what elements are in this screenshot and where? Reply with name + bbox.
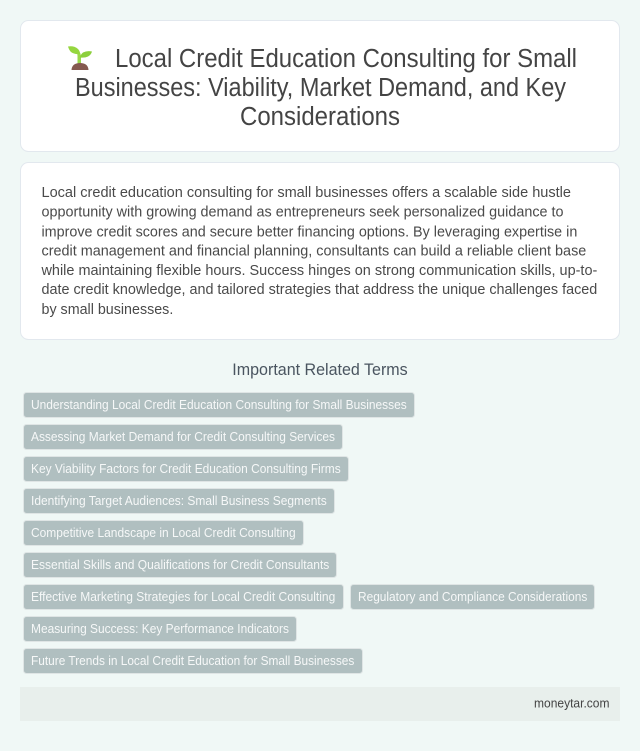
panel: summary description: [20, 162, 620, 340]
summary text block: credit management and financial planning, consultants can build a reliable client base: [42, 242, 586, 260]
summary text block: date credit knowledge, and tailored strategies that address the unique challenges faced: [42, 281, 597, 298]
footer: [20, 687, 620, 721]
tag: viability factors: [24, 456, 348, 482]
tag: essential skills: Essential Skills and Qualifications for Credit Consultants: [31, 557, 329, 572]
tag: measuring success: [24, 616, 296, 642]
tag: measuring success: Measuring Success: Key Performance Indicators: [31, 621, 289, 636]
footer source text: moneytar.com: [534, 695, 610, 710]
tag: competitive landscape: Competitive Landscape in Local Credit Consulting: [31, 525, 296, 540]
tag: competitive landscape: [24, 520, 304, 546]
tag: target audiences: [24, 488, 334, 514]
icon: seedling: [68, 46, 92, 70]
title text: Considerations: [240, 103, 400, 131]
summary text block: opportunity with growing demand as entrepreneurs seek personalized guidance to: [42, 204, 564, 220]
related terms tags: [24, 392, 594, 674]
tag: future trends: [24, 648, 362, 674]
tag: understanding: Understanding Local Credit Education Consulting for Small Businesses: [31, 397, 407, 412]
title text: Businesses: Viability, Market Demand, and Key: [75, 74, 566, 102]
tag: target audiences: Identifying Target Audiences: Small Business Segments: [31, 493, 327, 508]
title text: [75, 45, 577, 131]
summary text block: while maintaining flexible hours. Success hinges on strong communication skills, up-to-: [41, 262, 597, 279]
summary text block: [41, 184, 597, 318]
summary text block: Local credit education consulting for small businesses offers a scalable side hustle: [42, 184, 571, 201]
tag: regulatory: [350, 584, 594, 610]
tag: marketing strategies: Effective Marketing Strategies for Local Credit Consulting: [31, 589, 335, 604]
title panel: [20, 20, 620, 152]
tag: market demand: [24, 424, 342, 450]
tag: future trends: Future Trends in Local Credit Education for Small Businesses: [31, 653, 354, 668]
summary text block: improve credit scores and secure better financing options. By leveraging expertise in: [42, 224, 577, 240]
tag: marketing strategies: [24, 584, 344, 610]
tag: regulatory: Regulatory and Compliance Considerations: [358, 589, 587, 604]
tag: essential skills: [24, 552, 336, 578]
tag: market demand: Assessing Market Demand for Credit Consulting Services: [31, 429, 335, 444]
tag: understanding: [24, 392, 414, 418]
heading: important related terms: Important Related Terms: [232, 361, 408, 379]
title text: Local Credit Education Consulting for Small: [115, 45, 577, 73]
tag: viability factors: Key Viability Factors for Credit Education Consulting Firms: [31, 461, 341, 476]
summary text block: by small businesses.: [42, 301, 173, 318]
